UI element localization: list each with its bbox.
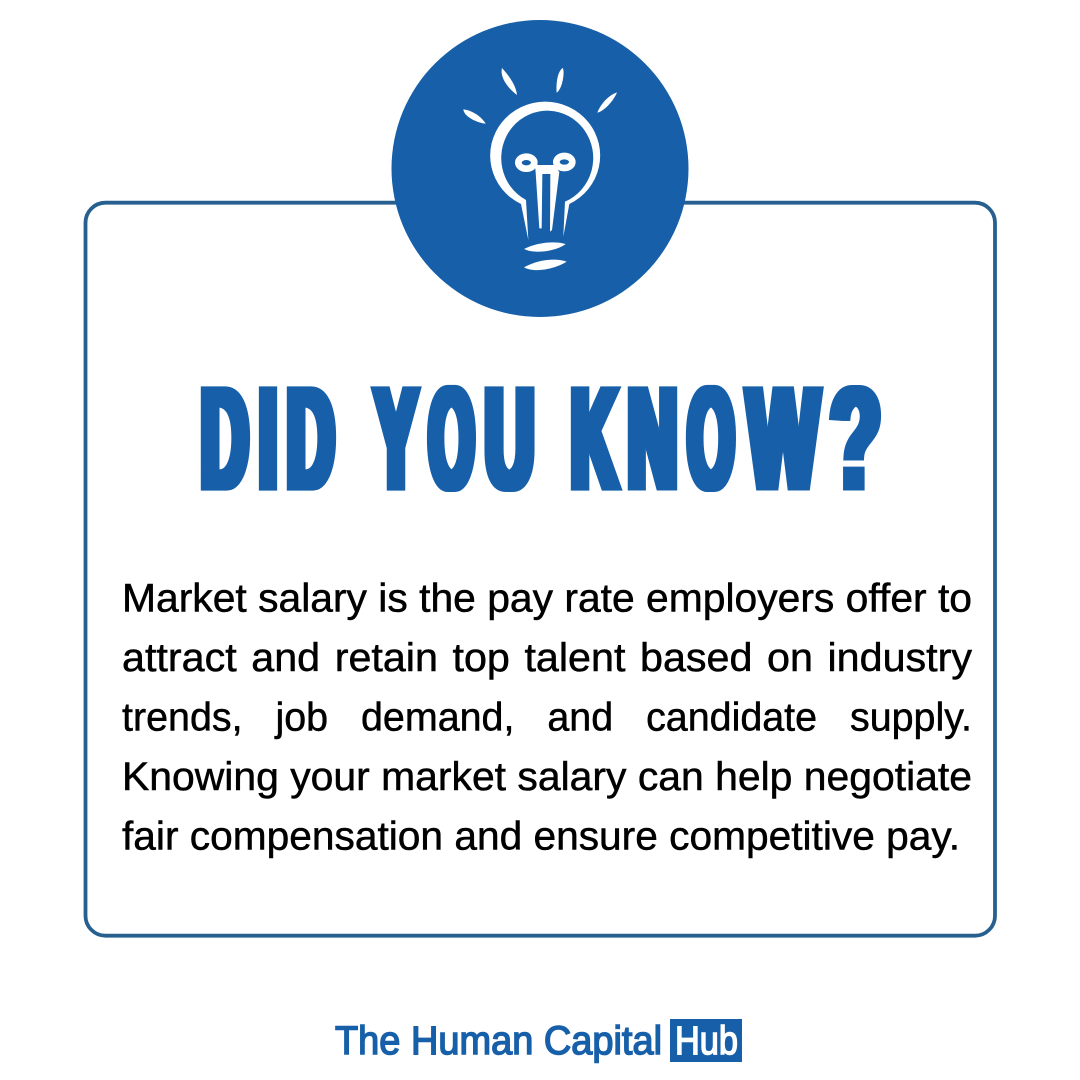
heading: did you know: ?: [830, 358, 881, 519]
text block: market salary explanation: Knowing your market salary can help negotiate: [122, 755, 972, 799]
text block: market salary explanation: trends, job demand, and candidate supply.: [122, 696, 972, 740]
heading: did you know: D: [201, 358, 248, 519]
logo: the human capital hub: Hub: [675, 1019, 738, 1063]
text block: market salary explanation: fair compensation and ensure competitive pay.: [122, 814, 960, 858]
text block: market salary explanation: [122, 576, 972, 858]
icon: light bulb badge: [392, 20, 688, 317]
panel: rounded card outline: [86, 203, 995, 936]
heading: did you know: U: [485, 357, 534, 519]
heading: did you know: W: [747, 359, 819, 519]
heading: did you know: K: [571, 357, 617, 519]
logo: the human capital hub: The Human Capital: [335, 1019, 662, 1063]
heading: did you know: [201, 357, 881, 520]
text block: market salary explanation: attract and retain top talent based on industry: [122, 636, 972, 680]
text block: market salary explanation: Market salary is the pay rate employers offer to: [122, 576, 972, 620]
heading: did you know: O: [688, 358, 734, 519]
heading: did you know: O: [429, 359, 474, 520]
heading: did you know: Y: [375, 358, 417, 519]
heading: did you know: D: [287, 358, 334, 519]
heading: did you know: I: [259, 357, 277, 519]
heading: did you know: N: [628, 358, 677, 519]
